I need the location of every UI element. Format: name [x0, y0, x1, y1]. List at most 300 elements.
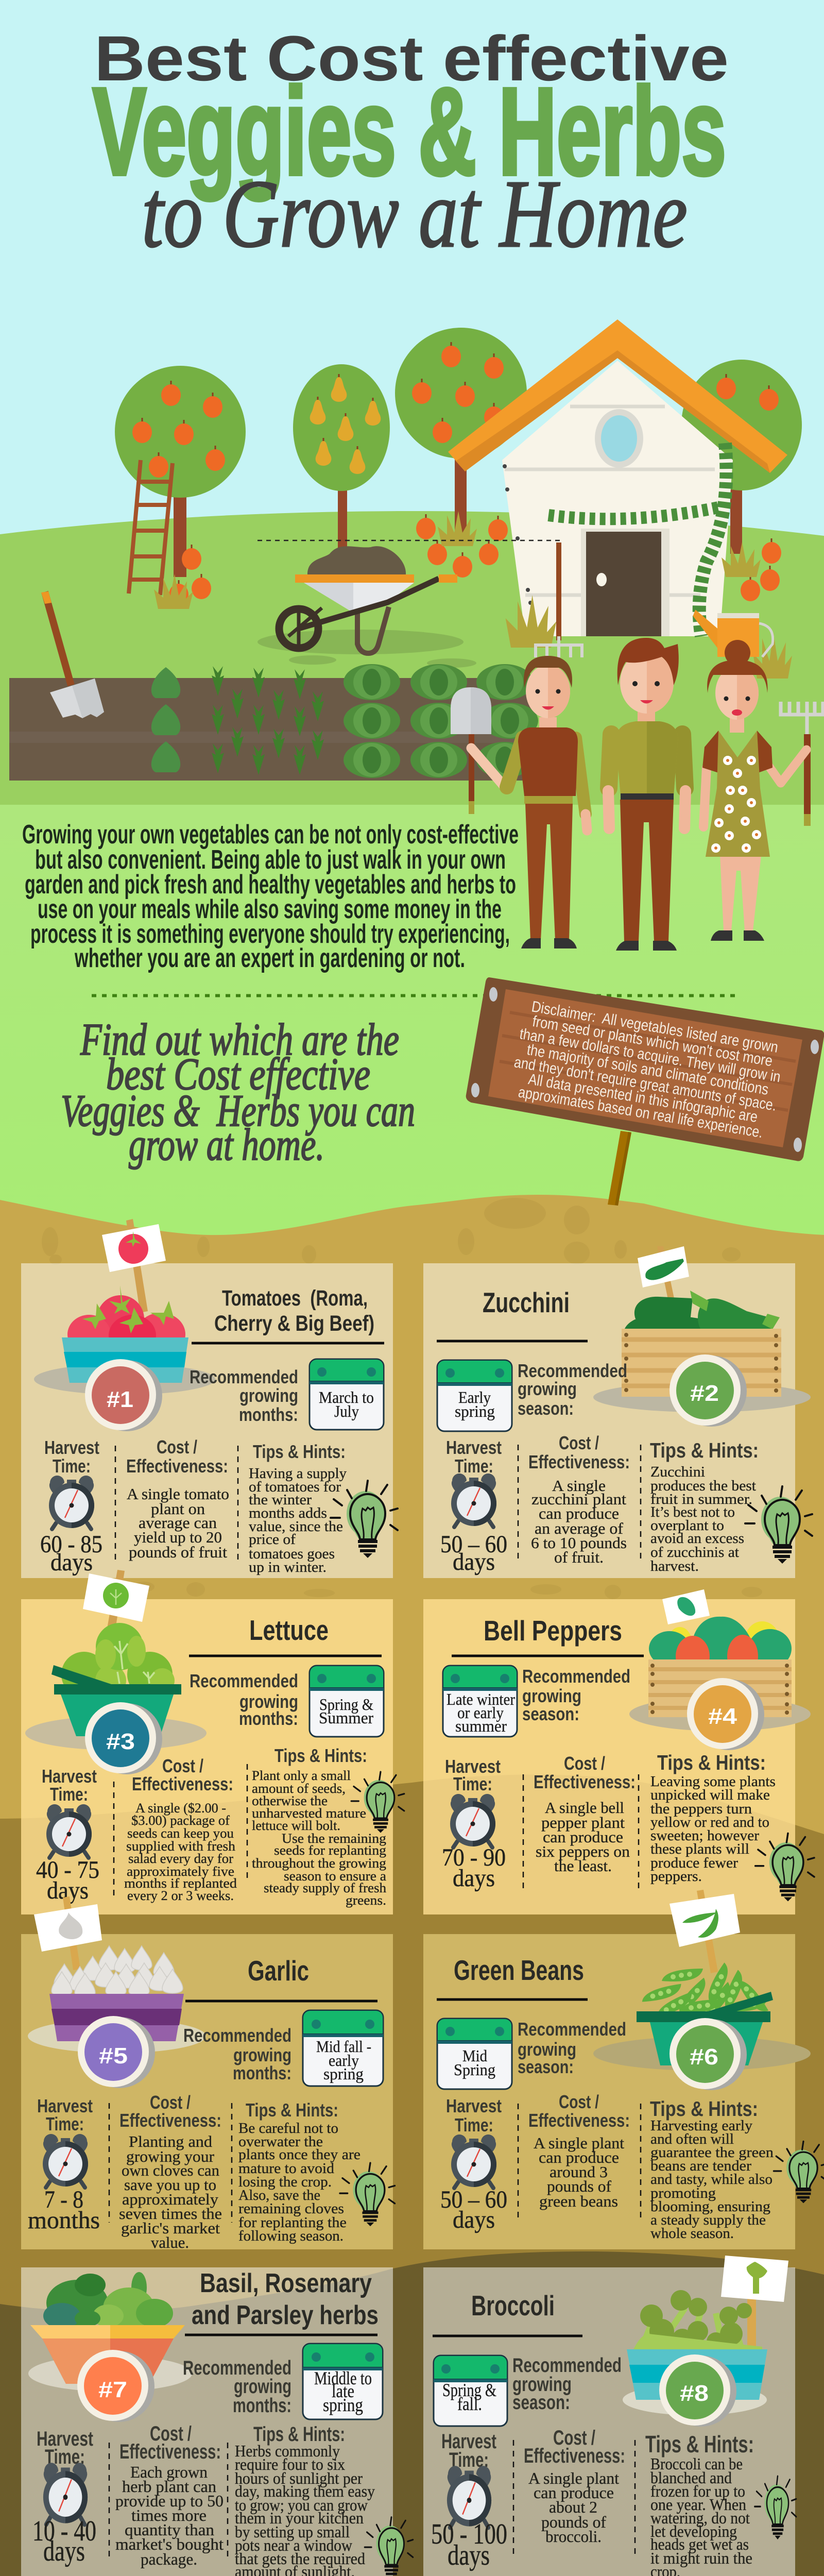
bulb	[351, 1772, 404, 1833]
growing season: season:	[518, 1398, 574, 1419]
calendar: Summer	[319, 1708, 373, 1727]
tips	[650, 2097, 774, 2242]
tips: beans are tender	[650, 2158, 752, 2174]
title: Bell Peppers	[484, 1615, 622, 1647]
growing months	[183, 2025, 291, 2083]
tips: yellow or red and to	[650, 1815, 769, 1831]
intro paragraph: garden and pick fresh and healthy vegetables and herbs to	[25, 870, 516, 900]
harvest time: days	[50, 1549, 93, 1576]
garden bed with vegetables	[9, 664, 538, 781]
cost effectiveness: Cost /	[150, 2092, 191, 2113]
title	[93, 23, 729, 267]
tips: plants once they are	[238, 2147, 360, 2163]
tips: produce fewer	[650, 1855, 739, 1871]
cost effectiveness	[119, 2092, 222, 2251]
calendar: Late winter	[447, 1690, 515, 1708]
dirt ground	[0, 1195, 824, 2576]
calendar	[303, 2344, 383, 2419]
tips: following season.	[238, 2228, 344, 2244]
harvest time	[32, 2428, 96, 2567]
intro paragraph: use on your meals while also saving some money in the	[38, 894, 502, 924]
tips: greens.	[346, 1892, 386, 1908]
harvest time: 50 – 60	[440, 2186, 507, 2213]
cost effectiveness: around 3	[550, 2163, 608, 2181]
tips: Tips & Hints:	[253, 2423, 345, 2446]
harvest time	[28, 2095, 100, 2234]
tips: Herbs commonly	[235, 2442, 340, 2460]
cost effectiveness: pepper plant	[541, 1814, 625, 1832]
intro paragraph: whether you are an expert in gardening or not.	[74, 943, 465, 973]
badge 7	[77, 2350, 154, 2422]
tips: Tips & Hints:	[650, 1438, 759, 1462]
title: to Grow at Home	[142, 160, 688, 267]
panel: garlic	[21, 1896, 395, 2251]
cost effectiveness: can produce	[534, 2483, 614, 2502]
tips: Use the remaining	[282, 1831, 386, 1846]
tips: for replanting the	[238, 2215, 347, 2231]
growing months	[190, 1670, 298, 1729]
herb pot	[28, 2272, 192, 2392]
tips: promoting	[650, 2185, 716, 2201]
panel: herbs	[21, 2267, 413, 2576]
broccoli sign	[721, 2256, 788, 2347]
growing months: growing	[239, 1691, 298, 1712]
intro paragraph: Growing your own vegetables can be not only cost-effective	[22, 820, 519, 850]
growing season: growing	[522, 1685, 581, 1706]
tips: whole season.	[650, 2226, 734, 2242]
cost effectiveness: Cost /	[157, 1436, 197, 1458]
cost effectiveness: Cost /	[150, 2422, 192, 2445]
harvest time: Time:	[455, 1455, 493, 1477]
ladder	[129, 460, 173, 595]
cost effectiveness	[524, 2427, 625, 2546]
harvest time: Harvest	[446, 2095, 502, 2116]
harvest time	[36, 1766, 99, 1904]
disclaimer sign: All data presented in this infographic are	[527, 1071, 759, 1126]
growing months: growing	[234, 2376, 291, 2398]
badge 2: #2	[690, 1381, 719, 1406]
cost effectiveness: A single plant	[528, 2469, 619, 2487]
badge 5	[78, 2016, 155, 2088]
cost effectiveness: garlic's market	[121, 2219, 220, 2237]
harvest time: days	[47, 1877, 89, 1904]
calendar: July	[334, 1402, 359, 1420]
cost effectiveness: A single	[552, 1477, 606, 1495]
calendar: March to	[319, 1388, 374, 1406]
cost effectiveness	[124, 1755, 237, 1903]
harvest time: months	[28, 2207, 100, 2234]
title: Tomatoes (Roma,	[222, 1286, 368, 1311]
tips: of tomatoes for	[249, 1479, 341, 1495]
panel: tomatoes	[21, 1219, 398, 1578]
cost effectiveness: plant on	[151, 1500, 205, 1518]
cost effectiveness: seeds can keep you	[127, 1825, 234, 1841]
tree: pear	[293, 364, 390, 549]
tips: and tasty, while also	[650, 2172, 772, 2188]
badge 6	[670, 2018, 747, 2090]
title: Best Cost effective	[94, 23, 729, 94]
growing season	[518, 2019, 626, 2077]
garlic sign	[34, 1896, 102, 1970]
tips: peppers.	[650, 1869, 702, 1885]
growing months: Recommended	[183, 2025, 291, 2046]
title: Cherry & Big Beef)	[214, 1311, 374, 1336]
tips: frozen for up to	[650, 2482, 745, 2500]
tips: losing the crop.	[238, 2174, 332, 2190]
cost effectiveness: pounds of fruit	[129, 1543, 227, 1561]
cost effectiveness: pounds of	[541, 2513, 606, 2531]
badge 2	[670, 1354, 747, 1427]
tips	[238, 2099, 360, 2244]
calendar	[437, 1360, 512, 1431]
tips: Tips & Hints:	[645, 2431, 754, 2458]
title	[192, 2268, 379, 2330]
disclaimer sign: and they don't require great amounts of space.	[513, 1054, 778, 1114]
tomato sign	[102, 1219, 166, 1313]
find out heading: Find out which are the	[80, 1015, 399, 1065]
calendar: fall.	[457, 2394, 482, 2414]
tips: watering, do not	[650, 2509, 750, 2527]
tips: avoid an excess	[650, 1531, 744, 1547]
cost effectiveness: times more	[131, 2506, 207, 2524]
badge 3	[85, 1702, 162, 1774]
cost effectiveness: pounds of	[547, 2177, 612, 2195]
cost effectiveness: Effectiveness:	[119, 2441, 221, 2463]
badge 4	[687, 1678, 764, 1750]
cost effectiveness	[534, 1753, 636, 1875]
tips: It’s best not to	[650, 1504, 735, 1520]
find out heading	[61, 1015, 415, 1170]
garden rake and watering can	[536, 543, 773, 657]
badge 4: #4	[708, 1704, 737, 1729]
cost effectiveness: Cost /	[564, 1753, 605, 1774]
cost effectiveness: the least.	[554, 1857, 612, 1875]
cost effectiveness: seven times the	[119, 2205, 222, 2223]
tips: fruit in summer.	[650, 1492, 752, 1507]
garlic basket	[28, 1946, 206, 2053]
tips: the peppers turn	[650, 1801, 752, 1817]
tips: the winter	[249, 1492, 312, 1508]
title: and Parsley herbs	[192, 2300, 379, 2330]
cost effectiveness: provide up to 50	[115, 2492, 224, 2510]
cost effectiveness: Each grown	[130, 2463, 208, 2481]
harvest time: Time:	[45, 2446, 85, 2468]
panel: lettuce	[21, 1570, 404, 1914]
bulb	[756, 1833, 814, 1901]
calendar: summer	[455, 1717, 507, 1735]
cost effectiveness: own cloves can	[122, 2161, 219, 2179]
cost effectiveness: green beans	[539, 2192, 618, 2210]
tips: value, since the	[249, 1519, 343, 1535]
tips: it might ruin the	[650, 2549, 752, 2567]
cost effectiveness: can produce	[543, 1828, 623, 1846]
cost effectiveness: can produce	[539, 1504, 619, 1522]
person: man with shovel	[451, 656, 587, 948]
cost effectiveness: quantity than	[125, 2520, 214, 2539]
calendar: Early	[458, 1388, 491, 1406]
tips: season to ensure a	[284, 1868, 386, 1884]
badge 1: #1	[107, 1387, 133, 1412]
dark soil layer	[0, 2251, 824, 2576]
harvest time: Time:	[50, 1784, 88, 1805]
bean basket	[593, 1962, 811, 2071]
cost effectiveness	[126, 1436, 229, 1561]
disclaimer post	[608, 1131, 631, 1206]
tips: these plants will	[650, 1841, 749, 1857]
harvest time: days	[448, 2539, 490, 2571]
harvest time: 50 - 100	[431, 2518, 507, 2550]
lettuce sign	[83, 1570, 149, 1636]
tips	[249, 1441, 347, 1575]
cost effectiveness: value.	[151, 2233, 189, 2251]
harvest time: Time:	[455, 2114, 493, 2136]
tips: unharvested mature	[252, 1805, 366, 1821]
mid soil layer	[0, 1774, 824, 2576]
calendar: early	[329, 2051, 359, 2070]
calendar	[437, 2019, 512, 2089]
badge 3: #3	[106, 1729, 135, 1754]
disclaimer sign: the majority of soils and climate conditions	[526, 1041, 770, 1098]
harvest time: Time:	[449, 2449, 489, 2471]
tree: apple centre	[395, 328, 527, 533]
fallen apples and grass	[154, 511, 792, 679]
calendar: Mid	[462, 2046, 487, 2065]
cost effectiveness: Effectiveness:	[528, 2110, 630, 2131]
tips: Plant only a small	[252, 1768, 351, 1783]
tips: Tips & Hints:	[650, 2097, 758, 2121]
cost effectiveness: A single plant	[534, 2134, 624, 2152]
panel: green beans	[423, 1890, 824, 2249]
growing season: Recommended	[518, 1360, 627, 1381]
disclaimer sign	[466, 977, 824, 1161]
cost effectiveness	[528, 2091, 630, 2210]
tips: guarantee the green	[650, 2145, 774, 2161]
growing season: growing	[518, 2039, 576, 2060]
cost effectiveness: average can	[139, 1514, 217, 1532]
tips: and often will	[650, 2131, 734, 2147]
tips: up in winter.	[249, 1560, 327, 1575]
tips: to grow; you can grow	[235, 2496, 368, 2514]
harvest time: Time:	[46, 2113, 84, 2134]
growing season: season:	[522, 1703, 579, 1724]
harvest time: 40 - 75	[36, 1856, 99, 1884]
cost effectiveness: A single tomato	[127, 1485, 229, 1503]
green hill	[0, 511, 824, 806]
badge 7: #7	[98, 2377, 127, 2402]
person: tall man	[608, 638, 685, 951]
growing months: months:	[233, 2395, 291, 2417]
cost effectiveness: six peppers on	[536, 1842, 630, 1860]
harvest time: Harvest	[445, 1756, 501, 1777]
broccoli basket	[623, 2290, 767, 2415]
growing season: season:	[518, 2056, 574, 2077]
bulb	[745, 1486, 812, 1564]
tips: Zucchini	[650, 1464, 705, 1480]
cost effectiveness: every 2 or 3 weeks.	[127, 1888, 234, 1903]
harvest time: days	[453, 2206, 495, 2233]
cost effectiveness: Effectiveness:	[524, 2445, 625, 2467]
cost effectiveness: salad every day for	[128, 1851, 233, 1866]
tips: tomatoes goes	[249, 1546, 335, 1562]
tips: Tips & Hints:	[274, 1745, 367, 1766]
calendar: Spring &	[319, 1695, 373, 1714]
bulb	[331, 1481, 398, 1558]
harvest time: Harvest	[446, 1437, 502, 1458]
cost effectiveness	[115, 2422, 224, 2568]
growing months	[183, 2357, 291, 2417]
harvest time: days	[453, 1548, 495, 1575]
calendar	[303, 2010, 383, 2086]
cost effectiveness: yield up to 20	[134, 1528, 222, 1546]
calendar: Mid fall -	[316, 2037, 371, 2056]
growing months: growing	[239, 1385, 298, 1406]
tips: months adds	[249, 1505, 327, 1521]
cost effectiveness: A single ($2.00 -	[135, 1800, 226, 1816]
harvest time: Time:	[453, 1773, 492, 1794]
harvest time: days	[453, 1865, 495, 1892]
tips: Leaving some plants	[650, 1774, 776, 1790]
harvest time	[442, 1756, 506, 1892]
tips: them in your kitchen	[235, 2509, 364, 2527]
tomato basket	[34, 1285, 215, 1395]
harvest time	[440, 1437, 507, 1575]
cost effectiveness	[528, 1432, 630, 1566]
tips: lettuce will bolt.	[252, 1818, 340, 1833]
tips: overplant to	[650, 1518, 724, 1534]
tips	[235, 2423, 375, 2576]
cost effectiveness: of fruit.	[554, 1548, 604, 1566]
title: Zucchini	[483, 1286, 570, 1318]
tips: harvest.	[650, 1558, 699, 1574]
cost effectiveness: zucchini plant	[531, 1490, 626, 1508]
person: woman with rake	[702, 640, 823, 941]
calendar: or early	[457, 1703, 504, 1722]
cost effectiveness: Effectiveness:	[126, 1455, 228, 1477]
lettuce basket	[25, 1623, 207, 1750]
calendar	[434, 2355, 507, 2426]
disclaimer sign: than a few dollars to acquire. They will grow in	[519, 1025, 782, 1086]
tips: produces the best	[650, 1478, 756, 1494]
calendar: spring	[323, 2395, 363, 2415]
tips: hours of sunlight per	[235, 2469, 363, 2487]
tips: by setting up small	[235, 2522, 350, 2541]
harvest time: 10 - 40	[32, 2515, 96, 2547]
growing months: growing	[233, 2044, 291, 2065]
title: Broccoli	[471, 2290, 555, 2321]
disclaimer sign: Disclaimer: All vegetables listed are grown	[530, 998, 779, 1056]
growing season	[518, 1360, 627, 1419]
calendar: late	[332, 2381, 354, 2401]
growing season: season:	[512, 2392, 570, 2414]
tips: blooming, ensuring	[650, 2199, 770, 2215]
tips: Tips & Hints:	[246, 2099, 338, 2121]
cost effectiveness: broccoli.	[545, 2527, 602, 2546]
cost effectiveness: can produce	[539, 2148, 619, 2166]
soil blotches	[42, 1198, 762, 1599]
zucchini sign	[638, 1246, 689, 1299]
tips: Having a supply	[249, 1466, 347, 1482]
calendar	[310, 1666, 384, 1737]
tips: Broccoli can be	[650, 2454, 743, 2473]
title: Lettuce	[249, 1614, 329, 1646]
cost effectiveness: about 2	[549, 2498, 597, 2516]
growing months: months:	[239, 1708, 298, 1729]
tips	[650, 1438, 759, 1574]
dashed divider	[92, 994, 735, 997]
bulb	[774, 2141, 824, 2203]
tips: price of	[249, 1532, 296, 1548]
tips	[650, 1751, 776, 1885]
find out heading: grow at home.	[129, 1120, 324, 1170]
growing months: Recommended	[183, 2357, 291, 2379]
calendar: spring	[323, 2064, 364, 2083]
title: Garlic	[248, 1955, 309, 1987]
tips: remaining cloves	[238, 2201, 344, 2217]
cost effectiveness: growing your	[126, 2147, 215, 2165]
bulb	[365, 2517, 413, 2576]
growing season: Recommended	[512, 2354, 622, 2377]
cost effectiveness: Cost /	[559, 2091, 599, 2112]
tips: day, making them easy	[235, 2482, 375, 2500]
title: Basil, Rosemary	[200, 2268, 372, 2298]
badge 1	[85, 1359, 162, 1431]
cost effectiveness: Effectiveness:	[132, 1773, 233, 1794]
cost effectiveness: Effectiveness:	[534, 1771, 636, 1792]
growing season: Recommended	[522, 1666, 630, 1687]
tips: require four to six	[235, 2455, 345, 2473]
cost effectiveness: Cost /	[559, 1432, 599, 1453]
panel: bell peppers	[423, 1589, 814, 1914]
bulb	[754, 2476, 796, 2539]
tips: Be careful not to	[238, 2121, 338, 2137]
tips: overwater the	[238, 2134, 323, 2150]
light green meadow	[0, 805, 824, 1243]
tips: a steady supply the	[650, 2212, 766, 2228]
harvest time: days	[43, 2535, 85, 2567]
shovel in bed	[41, 591, 104, 718]
growing season: Recommended	[518, 2019, 626, 2040]
harvest time: 60 - 85	[40, 1531, 102, 1558]
intro paragraph	[22, 820, 519, 973]
tips: Tips & Hints:	[253, 1441, 346, 1462]
cost effectiveness: market's bought	[115, 2535, 224, 2553]
disclaimer sign: from seed or plants which won't cost more	[531, 1013, 774, 1070]
tips: let developing	[650, 2522, 737, 2540]
harvest time: 7 - 8	[44, 2186, 83, 2213]
zucchini crate	[593, 1291, 811, 1412]
calendar	[310, 1359, 384, 1430]
tips: sweeten; however	[650, 1828, 760, 1844]
cost effectiveness: supplied with fresh	[126, 1838, 235, 1854]
tips: heads get wet as	[650, 2535, 749, 2553]
tree: apple left	[115, 366, 246, 577]
cost effectiveness: Cost /	[553, 2427, 595, 2449]
background sky	[0, 0, 824, 567]
harvest time: Time:	[53, 1455, 91, 1477]
growing season	[522, 1666, 630, 1724]
growing season: growing	[518, 1378, 577, 1399]
tips	[252, 1745, 386, 1908]
tips: one year. When	[650, 2495, 746, 2514]
cost effectiveness: Planting and	[129, 2132, 213, 2150]
growing season: growing	[512, 2374, 572, 2396]
tips: otherwise the	[252, 1793, 328, 1808]
tips: unpicked will make	[650, 1787, 770, 1803]
tips: pots near a window	[235, 2536, 352, 2554]
badge 6: #6	[690, 2044, 718, 2070]
calendar: Spring	[454, 2060, 495, 2079]
cost effectiveness: A single bell	[545, 1799, 624, 1817]
